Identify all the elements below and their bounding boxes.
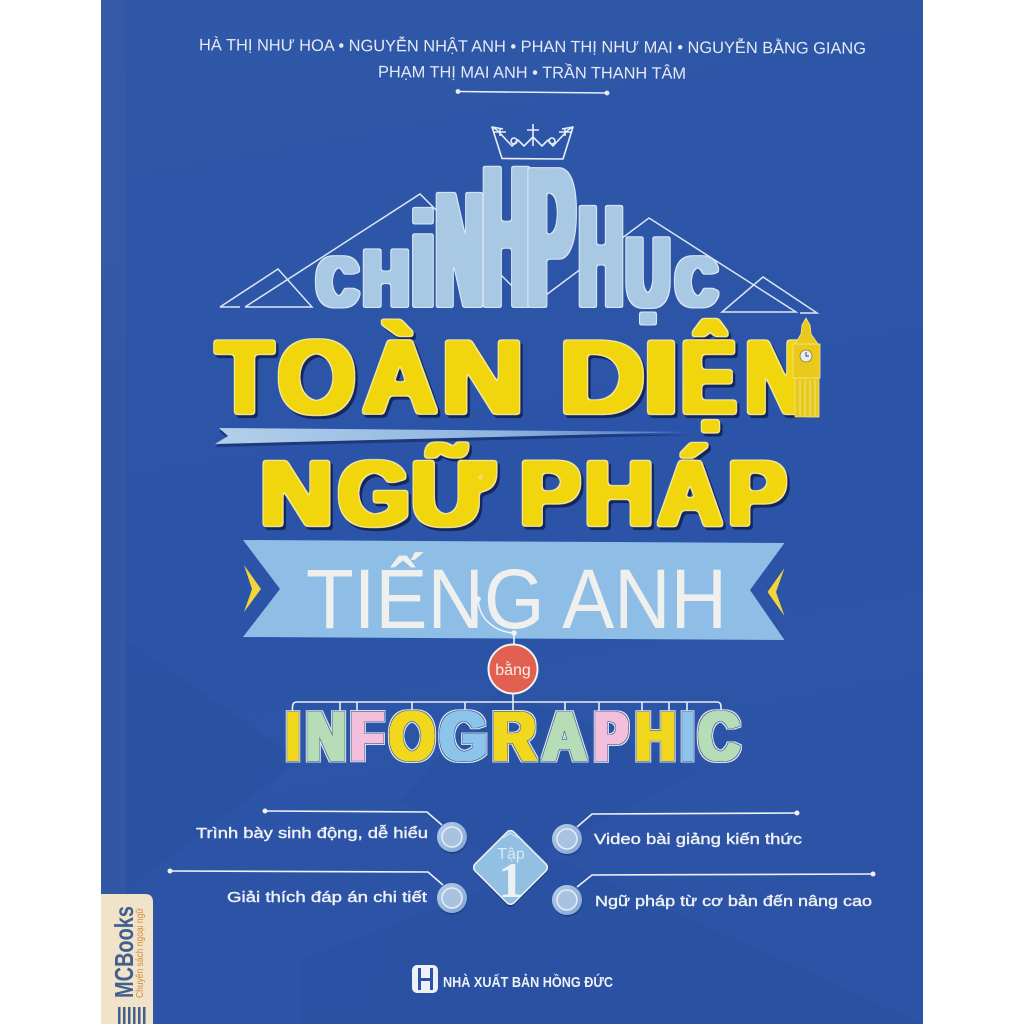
feature: Video bài giảng kiến thức: Video bài giảng kiến thức [594,831,803,848]
heading: INFOGRAPHIC: I [682,698,693,775]
heading: INFOGRAPHIC: R [492,697,536,775]
badge: Tập 1: Tập [497,846,525,863]
heading: CHINH PHỤC: H [483,124,530,349]
tab: MCBooks [101,894,153,1024]
tagline: Chuyên sách ngoại ngữ [135,908,146,998]
heading: CHINH PHỤC: Ụ [627,219,669,328]
authors line 1: HÀ THỊ NHƯ HOA • NGUYỄN NHẬT ANH • PHAN THỊ NHƯ MAI • NGUYỄN BẰNG GIANG [199,35,866,58]
heading: NGỮ PHÁP [260,442,786,545]
heading: TOÀN DIỆN: N [441,320,524,436]
heading: INFOGRAPHIC: A [543,697,586,775]
badge: bằng: bằng [495,660,531,679]
badge: Tập 1: 1 [498,852,524,908]
connector tree [292,693,721,712]
banner: TIẾNG ANH [243,540,784,646]
heading: CHINH PHỤC: H [580,176,622,337]
heading: NGỮ PHÁP: Ữ [411,443,494,545]
chevron left [244,565,261,612]
heading: CHINH PHỤC: C [318,244,357,322]
publisher name: NHÀ XUẤT BẢN HỒNG ĐỨC [443,973,613,991]
heading: TOÀN DIỆN: I [642,319,680,436]
heading: CHINH PHỤC [318,124,716,349]
heading: CHINH PHỤC: i [411,185,435,335]
heading: CHINH PHỤC: N [436,160,483,342]
heading: NGỮ PHÁP: G [338,442,410,545]
feature: Ngữ pháp từ cơ bản đến nâng cao [552,872,876,916]
heading: TOÀN DIỆN: T [216,319,273,435]
connector curve [476,597,516,648]
spine strip [101,0,126,1024]
heading: NGỮ PHÁP: H [584,443,654,544]
heading: INFOGRAPHIC: G [440,697,487,775]
ribbon arrow [215,428,692,447]
heading: CHINH PHỤC: P [528,126,574,349]
background shading polygons [126,640,923,1024]
icon: clock tower [793,318,820,417]
heading: INFOGRAPHIC: C [698,699,740,775]
heading: INFOGRAPHIC [287,697,740,776]
feature: Video bài giảng kiến thức [552,810,803,856]
banner text: TIẾNG ANH [306,552,727,646]
brand name: MCBooks [109,906,139,998]
divider with dots [456,89,609,95]
authors line 2: PHẠM THỊ MAI ANH • TRẦN THANH TÂM [378,62,686,83]
heading: TOÀN DIỆN: N [745,320,807,436]
heading: INFOGRAPHIC: H [636,699,675,775]
heading: NGỮ PHÁP: N [260,442,333,545]
chevron right [768,568,784,616]
heading: TOÀN DIỆN: Ệ [681,319,736,435]
heading: NGỮ PHÁP: Á [658,443,722,545]
badge: Tập 1 [472,829,549,908]
heading: CHINH PHỤC: C [677,244,716,322]
heading: TOÀN DIỆN: O [278,319,355,435]
heading: INFOGRAPHIC: I [287,698,299,775]
heading: INFOGRAPHIC: F [351,699,383,776]
authors [199,35,866,83]
publisher logo [412,965,613,993]
heading: INFOGRAPHIC: P [594,697,628,775]
feature: Trình bày sinh động, dễ hiểu: Trình bày sinh động, dễ hiểu [196,825,428,842]
barcode [118,1007,146,1024]
feature: Ngữ pháp từ cơ bản đến nâng cao: Ngữ pháp từ cơ bản đến nâng cao [595,893,872,910]
icon: publisher mark [412,965,438,993]
heading: INFOGRAPHIC: O [389,697,435,775]
feature: Trình bày sinh động, dễ hiểu [196,808,468,854]
feature: Giải thích đáp án chi tiết [168,868,468,914]
feature: Giải thích đáp án chi tiết: Giải thích đáp án chi tiết [227,889,428,906]
heading: CHINH PHỤC: H [364,234,408,324]
heading: TOÀN DIỆN: À [363,319,437,435]
heading: TOÀN DIỆN: D [559,319,645,435]
heading: NGỮ PHÁP: P [728,442,786,544]
icon: crown [492,124,573,159]
heading: INFOGRAPHIC: N [306,699,346,775]
heading: TOÀN DIỆN [216,319,807,436]
heading: NGỮ PHÁP: P [520,443,580,545]
badge: bằng [488,644,538,694]
mountain line art [220,194,817,313]
